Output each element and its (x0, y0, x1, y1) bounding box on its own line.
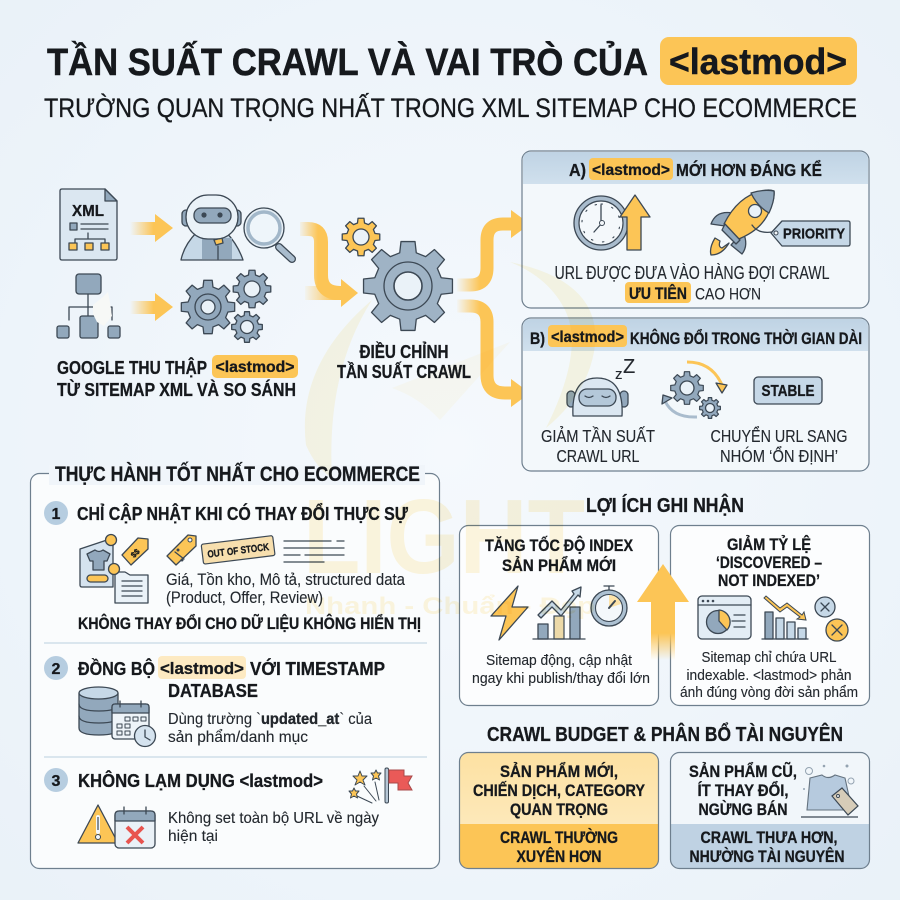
panel A header: <lastmod> (592, 162, 670, 179)
icon: browser with pie chart (698, 596, 751, 639)
item 3: KHÔNG LẠM DỤNG <lastmod> (78, 770, 323, 791)
card top text (689, 761, 797, 819)
text: reduce crawl: CRAWL URL (556, 446, 640, 466)
text: move to stable group: CHUYỂN URL SANG (710, 425, 848, 446)
icon: central gear (364, 242, 452, 330)
card bottom text: NHƯỜNG TÀI NGUYÊN (690, 847, 844, 866)
icon: cross circles (815, 597, 848, 641)
title badge: lastmod: <lastmod> (669, 41, 847, 82)
arrow: xml to robot (130, 214, 173, 242)
item 1: CHỈ CẬP NHẬT KHI CÓ THAY ĐỔI THỰC SỰ (77, 503, 408, 524)
arrow: up between benefit cards (637, 564, 689, 660)
card bottom text: CRAWL THƯỜNG (500, 828, 618, 847)
watermark logo (303, 262, 595, 620)
text: what to update (166, 571, 406, 607)
card heading: SẢN PHẨM MỚI (502, 556, 616, 575)
icon: gears with cycle arrows (662, 362, 727, 418)
item 2 (44, 656, 385, 746)
card text: Sitemap chỉ chứa URL (702, 649, 836, 666)
watermark logo: Nhanh - Chuẩn - Đẹp (305, 593, 595, 620)
icon: falling bar chart (762, 596, 808, 639)
card: new products high priority (460, 752, 658, 868)
icon: xml document (60, 189, 117, 260)
panel: ecommerce best practices (30, 462, 440, 868)
item 2: ĐỒNG BỘ (78, 658, 155, 679)
card top text: SẢN PHẨM CŨ, (689, 761, 797, 781)
item 2: 2 (52, 661, 61, 678)
card text: Sitemap động, cập nhật (486, 652, 633, 669)
card bottom text: XUYÊN HƠN (516, 847, 602, 866)
panel B header: B) (530, 329, 545, 348)
text: use updated_at (168, 711, 372, 746)
item 2: DATABASE (168, 681, 258, 701)
icon: xml document: XML (72, 203, 104, 220)
panel B header: <lastmod> (551, 329, 624, 346)
arrow: up to panel A (457, 210, 530, 285)
arrow: curved into central gear (300, 229, 358, 307)
item 2: <lastmod> (160, 659, 244, 678)
card: reduce discovered not indexed (670, 526, 870, 706)
label: google collects lastmod: GOOGLE THU THẬP (57, 357, 207, 378)
arrow: down to panel B (457, 306, 530, 407)
icon: red flag (385, 768, 412, 803)
icon: description lines (284, 541, 344, 562)
card heading: ‘DISCOVERED – (716, 553, 822, 572)
card bottom text (500, 828, 618, 866)
text: do not set all urls (168, 810, 379, 845)
tag: out of stock: OUT OF STOCK (207, 542, 270, 561)
item 1: KHÔNG THAY ĐỔI CHO DỮ LIỆU KHÔNG HIỂN THỊ (78, 613, 421, 633)
card top text: SẢN PHẨM MỚI, (500, 762, 618, 781)
card top text: CHIẾN DỊCH, CATEGORY (473, 781, 646, 800)
icon: clock with up arrow (574, 195, 650, 250)
label: google collects lastmod: <lastmod> (216, 359, 294, 376)
panel heading: THỰC HÀNH TỐT NHẤT CHO ECOMMERCE (55, 462, 420, 486)
text: do not set all urls: hiện tại (168, 828, 218, 845)
icon: product page with tag (80, 534, 148, 603)
tag: stable (754, 377, 822, 404)
panel A text: CAO HƠN (695, 284, 761, 304)
icon: robot with magnifier (181, 195, 292, 260)
panel A: lastmod newer (522, 151, 869, 308)
card bottom text (690, 828, 844, 866)
item 3: 3 (52, 773, 61, 790)
card heading: GIẢM TỶ LỆ (727, 535, 811, 554)
panel B: lastmod unchanged (522, 318, 869, 471)
panel A header: A) (569, 160, 586, 180)
panel B header (523, 319, 868, 351)
card heading: TĂNG TỐC ĐỘ INDEX (485, 535, 634, 555)
item 3 (44, 768, 412, 848)
text: move to stable group (710, 425, 848, 466)
panel A text: ƯU TIÊN (629, 284, 687, 303)
icon: small yellow gear (342, 218, 380, 256)
tag: stable: STABLE (762, 383, 814, 400)
icon: rising bar chart (533, 587, 585, 639)
heading: crawl budget: CRAWL BUDGET & PHÂN BỔ TÀI NGUYÊN (487, 722, 843, 746)
icon: sleeping robot: z (615, 366, 622, 383)
card top text (473, 762, 646, 819)
icon: discount tag (167, 535, 196, 565)
icon: sitemap tree (57, 274, 120, 338)
icon: sleeping robot: Z (623, 356, 635, 378)
card text (680, 649, 858, 701)
card top text: QUAN TRỌNG (510, 800, 608, 819)
card heading (716, 535, 822, 590)
icon: stopwatch (591, 586, 627, 626)
icon: database with calendar (79, 687, 156, 746)
text: move to stable group: NHÓM ‘ỔN ĐỊNH’ (720, 445, 838, 466)
arrow: sitemap to gears (130, 293, 173, 321)
card: faster indexing (460, 526, 658, 706)
card top text: NGỪNG BÁN (698, 800, 788, 819)
tag: priority: PRIORITY (783, 226, 845, 242)
card text (472, 652, 650, 687)
panel A text: URL ĐƯỢC ĐƯA VÀO HÀNG ĐỢI CRAWL (554, 263, 830, 283)
card top text: ÍT THAY ĐỔI, (698, 781, 788, 800)
text: what to update: Giá, Tồn kho, Mô tả, structured data (166, 571, 406, 589)
panel A text (554, 263, 830, 304)
card heading: NOT INDEXED’ (718, 571, 820, 590)
tag: priority (771, 221, 850, 246)
panel A header (523, 152, 868, 184)
item 2: VỚI TIMESTAMP (250, 658, 385, 679)
card: old products low priority (670, 752, 870, 868)
text: reduce crawl: GIẢM TẦN SUẤT (541, 425, 655, 446)
icon: rocket (710, 190, 774, 255)
text: what to update: (Product, Offer, Review) (166, 589, 323, 607)
item 1: 1 (52, 506, 61, 523)
watermark logo: LIGHT (303, 478, 585, 596)
title: TẦN SUẤT CRAWL VÀ VAI TRÒ CỦA (47, 40, 648, 84)
card text: ánh đúng vòng đời sản phẩm (680, 684, 858, 701)
text: reduce crawl (541, 425, 655, 466)
card heading (485, 535, 634, 575)
label: adjust crawl frequency: TẦN SUẤT CRAWL (337, 361, 471, 382)
icon: lightning bolt (491, 586, 528, 640)
item 1 (44, 501, 421, 633)
panel A header: MỚI HƠN ĐÁNG KỂ (676, 159, 822, 180)
text: use updated_at: sản phẩm/danh mục (168, 728, 308, 746)
icon: old shirt with tag (801, 764, 858, 817)
icon: fireworks (349, 770, 381, 803)
label: adjust crawl frequency (337, 341, 471, 382)
heading: recorded benefits: LỢI ÍCH GHI NHẬN (586, 493, 744, 517)
text: do not set all urls: Không set toàn bộ URL về ngày (168, 810, 379, 827)
text: use updated_at: Dùng trường `updated_at` của (168, 711, 372, 728)
icon: three gears (181, 270, 271, 342)
tag: out of stock (201, 536, 275, 564)
label: google collects lastmod (57, 355, 298, 400)
card text: ngay khi publish/thay đổi lớn (472, 670, 650, 687)
icon: sleeping robot (567, 356, 635, 416)
label: google collects lastmod: TỪ SITEMAP XML VÀ SO SÁNH (57, 379, 296, 400)
icon: warning with crossed calendar (78, 805, 155, 848)
icon: product page with tag: $$ (129, 547, 142, 560)
label: adjust crawl frequency: ĐIỀU CHỈNH (360, 341, 448, 362)
card text: indexable. <lastmod> phản (686, 667, 852, 684)
card bottom text: CRAWL THƯA HƠN, (700, 828, 838, 847)
